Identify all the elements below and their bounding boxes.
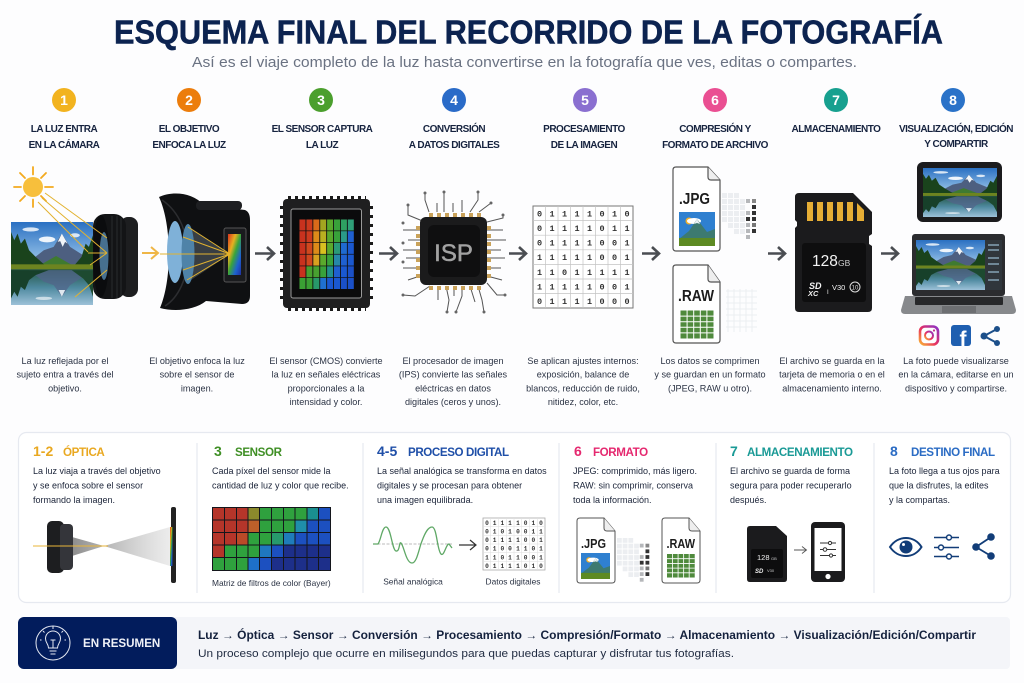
chart: digital data grid: 11011001	[485, 554, 543, 562]
step 4 description	[399, 356, 508, 407]
step 6 description: y se guardan en un formato	[654, 370, 766, 380]
illustration: JPG file	[673, 167, 756, 251]
illustration: tablet with photo	[917, 162, 1002, 222]
illustration: SD memory card: V30	[832, 283, 845, 292]
panel: sensor: Matriz de filtros de color (Bayer)	[212, 578, 331, 588]
step 6 heading: COMPRESIÓN Y	[679, 122, 752, 135]
illustration: ISP chip	[402, 190, 506, 314]
icon: SD card	[747, 526, 787, 582]
illustration: SD memory card: XC	[807, 289, 819, 298]
icon: SD card: SD	[755, 569, 764, 575]
step 8 heading: VISUALIZACIÓN, EDICIÓN	[899, 122, 1013, 135]
panel: storage: después.	[730, 495, 767, 505]
step 4 heading	[409, 88, 500, 151]
panel: storage: 7	[730, 443, 738, 459]
illustration: RAW file	[673, 265, 757, 343]
panel: summary text background	[170, 617, 1010, 669]
arrow	[255, 247, 274, 260]
panel: en resumen badge: EN RESUMEN	[83, 637, 160, 650]
title: ESQUEMA FINAL DEL RECORRIDO DE LA FOTOGRAFÍA	[114, 14, 943, 50]
step 6 heading: FORMATO DE ARCHIVO	[662, 140, 769, 151]
step 1 description: sujeto entra a través del	[16, 370, 114, 380]
step 7 heading: 7	[832, 92, 840, 108]
step 5 description: Se aplican ajustes internos:	[527, 356, 639, 366]
illustration: binary data grid: 11111001	[537, 253, 630, 263]
panel: final destination: y la compartas.	[889, 495, 950, 505]
summary sentence: Un proceso complejo que ocurre en milisegundos para que puedas capturar y disfrutar tus fotografías.	[198, 648, 734, 660]
panel: digital process: Señal analógica	[383, 576, 443, 586]
panel: format: RAW: sin comprimir, conserva	[573, 480, 693, 490]
step 7 heading	[792, 88, 881, 135]
illustration: SD memory card: SD	[809, 281, 822, 291]
step 3 description: El sensor (CMOS) convierte	[269, 356, 383, 366]
step 8 heading	[899, 88, 1013, 150]
icon: SD card: 128	[757, 553, 770, 562]
step 3 description: proporcionales a la	[288, 384, 365, 394]
step 5 heading	[543, 88, 626, 151]
illustration: laptop with editing app	[901, 234, 1016, 314]
step 4 heading: CONVERSIÓN	[423, 122, 485, 135]
step 1 heading	[29, 88, 100, 151]
step 2 heading: 2	[185, 92, 193, 108]
arrow	[768, 247, 785, 260]
panel: format: toda la información.	[573, 495, 652, 505]
arrow	[881, 247, 898, 260]
illustration: SD memory card	[795, 193, 872, 312]
chart: digital data grid	[483, 518, 545, 570]
subtitle: Así es el viaje completo de la luz hasta convertirse en la fotografía que ves, editas o compartes.	[192, 54, 857, 71]
panel: digital process: digitales y se procesan para obtener	[377, 480, 522, 490]
step 3 description: intensidad y color.	[290, 397, 362, 407]
arrow	[459, 540, 476, 550]
arrow	[794, 546, 806, 554]
panel: final destination: que la disfrutes, la edites	[889, 480, 989, 490]
step 1 description	[16, 356, 114, 394]
illustration: binary data grid: 01111010	[537, 210, 630, 220]
panel: detail summary card	[18, 432, 1010, 602]
step 1 description: objetivo.	[48, 384, 82, 394]
panel: optics: formando la imagen.	[33, 495, 115, 505]
panel: sensor: Cada píxel del sensor mide la	[212, 466, 331, 476]
panel: format: 6	[574, 443, 582, 459]
arrow	[509, 247, 526, 260]
step 2 heading	[152, 88, 226, 151]
step 6 description: (JPEG, RAW u otro).	[668, 384, 752, 394]
step 2 description	[149, 356, 245, 394]
icon: JPG file: .JPG	[581, 537, 606, 551]
panel: digital process: 4-5	[377, 443, 397, 459]
icon: share	[980, 326, 1000, 346]
panel: optics: 1-2	[33, 443, 53, 459]
step 3 description	[269, 356, 383, 407]
arrow: yellow	[142, 247, 158, 259]
chart: Bayer filter matrix	[212, 507, 331, 571]
panel: storage: segura para poder recuperarlo	[730, 480, 852, 490]
step 7 heading: ALMACENAMIENTO	[792, 124, 881, 135]
step 8 description: en la cámara, editarse en un	[898, 370, 1014, 380]
illustration: CMOS sensor	[282, 198, 371, 309]
illustration: SD memory card: GB	[838, 258, 851, 268]
step 2 description: imagen.	[181, 384, 213, 394]
icon: share	[972, 533, 995, 560]
panel: storage: El archivo se guarda de forma	[730, 466, 850, 476]
step 5 description	[526, 356, 640, 407]
panel: sensor: 3	[214, 443, 222, 459]
step 7 description	[779, 356, 886, 394]
panel: sensor	[212, 443, 349, 588]
step 2 description: El objetivo enfoca la luz	[149, 356, 245, 366]
chart: analog signal wave	[373, 527, 452, 563]
step 8 description: La foto puede visualizarse	[903, 356, 1009, 366]
panel: en resumen badge	[18, 617, 177, 669]
panel: optics	[33, 443, 176, 583]
step 4 heading: A DATOS DIGITALES	[409, 140, 500, 151]
illustration: SD memory card: I	[827, 290, 829, 296]
step 3 heading	[272, 88, 373, 151]
step 1 description: La luz reflejada por el	[22, 356, 108, 366]
step 8 heading: 8	[949, 92, 957, 108]
panel: storage	[730, 443, 853, 582]
arrow	[642, 247, 659, 260]
step 6 description	[654, 356, 766, 394]
step 5 heading: 5	[581, 92, 589, 108]
step 6 heading: 6	[711, 92, 719, 108]
chart: digital data grid: 01001101	[485, 546, 543, 552]
panel: optics: La luz viaja a través del objetivo	[33, 466, 161, 476]
illustration: SD memory card: 128	[812, 253, 838, 270]
step 5 description: blancos, reducción de ruido,	[526, 384, 640, 394]
illustration: ISP chip: ISP	[434, 240, 473, 267]
step 4 description: digitales (ceros y unos).	[405, 397, 501, 407]
step 8 description	[898, 356, 1014, 394]
icon: facebook: f	[960, 328, 968, 351]
panel: storage: ALMACENAMIENTO	[747, 446, 853, 459]
icon: light bulb	[36, 626, 70, 660]
panel: digital process: una imagen equilibrada.	[377, 495, 473, 505]
chart: digital data grid: 01010011	[485, 528, 543, 536]
panel: final destination: 8	[890, 443, 898, 459]
illustration: SD memory card: 10	[852, 286, 859, 292]
illustration: binary data grid	[533, 206, 633, 308]
step 4 description: (IPS) convierte las señales	[399, 370, 508, 380]
icon: phone with controls	[811, 522, 845, 582]
illustration: binary data grid: 11011111	[537, 268, 630, 278]
panel: optics: y se enfoca sobre el sensor	[33, 480, 143, 490]
illustration: binary data grid: 01111001	[537, 239, 630, 249]
icon: RAW file: .RAW	[666, 537, 695, 551]
step 1 heading: EN LA CÁMARA	[29, 138, 100, 151]
panel: final destination: La foto llega a tus ojos para	[889, 466, 1000, 476]
step 5 heading: DE LA IMAGEN	[551, 140, 617, 151]
panel: digital process	[373, 443, 547, 586]
illustration: binary data grid: 01111000	[537, 297, 630, 307]
step 5 heading: PROCESAMIENTO	[543, 124, 626, 135]
icon: SD card: V30	[767, 568, 775, 573]
summary flow text: Luz → Óptica → Sensor → Conversión → Procesamiento → Compresión/Formato → Almacenamiento → Visualización/Edición/Compartir	[198, 629, 976, 642]
step 8 heading: Y COMPARTIR	[924, 139, 989, 150]
icon: SD card: GB	[771, 556, 777, 561]
illustration: lens cutaway focusing on sensor	[159, 193, 250, 310]
panel: final destination: DESTINO FINAL	[911, 446, 995, 459]
panel: sensor: cantidad de luz y color que recibe.	[212, 480, 349, 490]
panel: format	[573, 443, 700, 583]
illustration: JPG file: .JPG	[679, 191, 710, 208]
step 4 description: El procesador de imagen	[402, 356, 504, 366]
step 6 description: Los datos se comprimen	[660, 356, 760, 366]
panel: format: JPEG: comprimido, más ligero.	[573, 466, 697, 476]
step 4 description: eléctricas en datos	[415, 384, 491, 394]
icon: facebook	[951, 325, 971, 351]
icon: eye	[890, 538, 922, 556]
step 4 heading: 4	[450, 92, 458, 108]
step 1 heading: 1	[60, 92, 68, 108]
step 6 heading	[662, 88, 769, 151]
panel: digital process: Datos digitales	[486, 576, 540, 586]
panel: digital process: La señal analógica se transforma en datos	[377, 466, 547, 476]
step 2 description: sobre el sensor de	[160, 370, 234, 380]
icon: instagram	[920, 326, 938, 344]
chart: digital data grid: 01111010	[485, 520, 543, 527]
step 3 heading: 3	[317, 92, 325, 108]
step 3 heading: EL SENSOR CAPTURA	[272, 124, 373, 135]
arrow	[379, 247, 397, 260]
step 3 description: la luz en señales eléctricas	[272, 370, 381, 380]
step 8 description: dispositivo y compartirse.	[905, 384, 1007, 394]
icon: sliders	[934, 535, 959, 559]
illustration: binary data grid: 01111011	[537, 224, 630, 234]
step 3 heading: LA LUZ	[306, 140, 338, 151]
illustration: RAW file: .RAW	[678, 288, 714, 305]
panel: sensor: SENSOR	[235, 446, 283, 459]
chart: digital data grid: 01111010	[485, 563, 543, 570]
illustration: binary data grid: 11111001	[537, 282, 630, 292]
illustration: sun, landscape and lens	[11, 167, 138, 305]
chart: digital data grid: 01111001	[485, 537, 543, 544]
step 7 description: almacenamiento interno.	[782, 384, 882, 394]
panel: format: FORMATO	[593, 446, 648, 459]
step 7 description: tarjeta de memoria o en el	[779, 370, 885, 380]
panel: final destination	[889, 443, 1000, 560]
panel: digital process: PROCESO DIGITAL	[408, 446, 509, 459]
step 7 description: El archivo se guarda en la	[779, 356, 886, 366]
step 2 heading: ENFOCA LA LUZ	[152, 140, 226, 151]
panel: optics: ÓPTICA	[63, 446, 105, 459]
icon: lens and inverted image	[33, 507, 176, 583]
step 1 heading: LA LUZ ENTRA	[31, 124, 97, 135]
step 5 description: nitidez, color, etc.	[548, 397, 618, 407]
step 5 description: exposición, balance de	[537, 370, 629, 380]
step 2 heading: EL OBJETIVO	[159, 124, 220, 135]
